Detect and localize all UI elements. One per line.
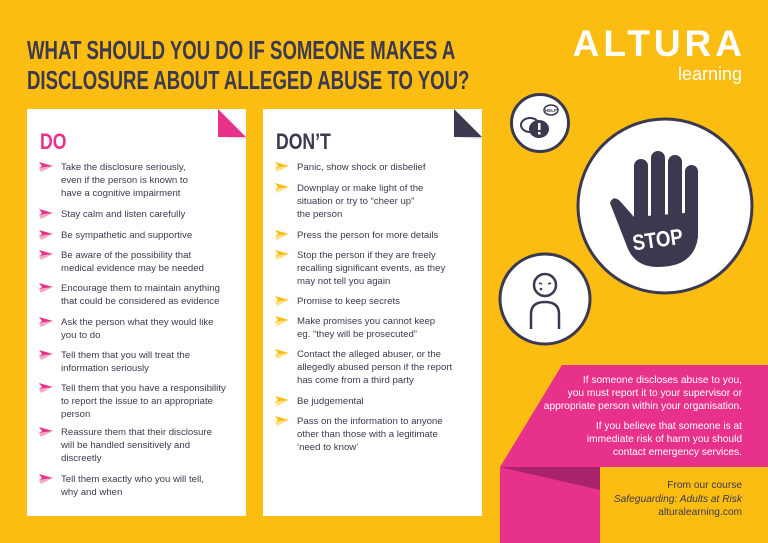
- panel: DON'T: ‘need to know’: [297, 442, 358, 453]
- heading DO: DO: [40, 129, 66, 154]
- title: [27, 35, 469, 95]
- logo: [573, 23, 746, 84]
- logo: ALTURA: [573, 23, 746, 64]
- panel: DO: Encourage them to maintain anything: [61, 283, 220, 294]
- panel: DON'T: allegedly abused person if the report: [297, 362, 452, 373]
- panel: DO: Tell them that you will treat the: [61, 350, 190, 361]
- callout text: [544, 375, 742, 412]
- title: WHAT SHOULD YOU DO IF SOMEONE MAKES A: [27, 35, 455, 65]
- bullets yellow: [275, 162, 289, 426]
- panel: DON'T: Contact the alleged abuser, or the: [297, 349, 441, 360]
- panel: DO: discreetly: [61, 453, 102, 464]
- footer course credit: Safeguarding: Adults at Risk: [614, 494, 742, 504]
- panel: DO: you to do: [61, 330, 100, 341]
- panel: DON'T: the person: [297, 209, 342, 220]
- panel: DO: that could be considered as evidence: [61, 296, 219, 307]
- fold corner navy: [454, 109, 482, 139]
- heading DON'T: DON’T: [276, 129, 331, 154]
- callout text: you must report it to your supervisor or: [568, 388, 742, 399]
- callout text: If someone discloses abuse to you,: [583, 375, 742, 386]
- panel: DO: Be sympathetic and supportive: [61, 230, 192, 241]
- bullets pink: [39, 162, 53, 484]
- panel: DON'T: Panic, show shock or disbelief: [297, 162, 426, 173]
- panel: DON'T: Stop the person if they are freely: [297, 250, 436, 261]
- fold corner pink: [218, 109, 246, 139]
- footer course credit: alturalearning.com: [658, 507, 742, 518]
- panel: DO: medical evidence may be needed: [61, 263, 204, 274]
- panel: DO: Be aware of the possibility that: [61, 250, 191, 261]
- panel: DON'T: Make promises you cannot keep: [297, 316, 435, 327]
- icon: stop hand: STOP: [631, 225, 685, 256]
- panel: DON'T: Press the person for more details: [297, 230, 438, 241]
- panel: DO: person: [61, 409, 90, 420]
- callout text: appropriate person within your organisation.: [544, 401, 742, 412]
- icon: help speech bubbles: [510, 93, 570, 153]
- panel: DO: even if the person is known to: [61, 175, 188, 186]
- panel: DO: Take the disclosure seriously,: [61, 162, 186, 173]
- panel: DON'T: recalling significant events, as they: [297, 263, 445, 274]
- icon: stop hand: [576, 118, 754, 294]
- footer course credit: From our course: [667, 480, 742, 491]
- text: contact emergency services.: [613, 447, 742, 458]
- panel: DON'T: [263, 109, 482, 516]
- icon: help speech bubbles: HELP: [545, 108, 557, 113]
- panel: DO: Ask the person what they would like: [61, 317, 214, 328]
- footer course credit: [614, 480, 742, 518]
- panel: DO: will be handled sensitively and: [61, 440, 190, 451]
- panel: DON'T: eg. “they will be prosecuted”: [297, 329, 417, 340]
- panel: DON'T: Promise to keep secrets: [297, 296, 400, 307]
- panel: DON'T: other than those with a legitimate: [297, 429, 438, 440]
- icon: sad person: [498, 252, 592, 346]
- panel: DON'T: situation or try to “cheer up”: [297, 196, 414, 207]
- panel: DO: Reassure them that their disclosure: [61, 427, 212, 438]
- text: If you believe that someone is at: [596, 421, 742, 432]
- panel: DON'T: Downplay or make light of the: [297, 183, 423, 194]
- panel: DON'T: may not tell you again: [297, 276, 390, 287]
- panel: DO: Tell them that you have a responsibility: [61, 383, 226, 394]
- title: DISCLOSURE ABOUT ALLEGED ABUSE TO YOU?: [27, 65, 469, 95]
- panel: DON'T: has come from a third party: [297, 375, 414, 386]
- panel: DO: Tell them exactly who you will tell,: [61, 474, 204, 485]
- panel: DO: information seriously: [61, 363, 149, 374]
- panel: DO: why and when: [61, 487, 122, 498]
- panel: DON'T: Pass on the information to anyone: [297, 416, 443, 427]
- panel: DO: have a cognitive impairment: [61, 188, 180, 199]
- text: immediate risk of harm you should: [587, 434, 742, 445]
- panel: DO: to report the issue to an appropriate: [61, 396, 213, 407]
- panel: DON'T: Be judgemental: [297, 396, 364, 407]
- panel: DO: [27, 109, 246, 516]
- logo: learning: [678, 64, 742, 84]
- panel: DO: Stay calm and listen carefully: [61, 209, 185, 220]
